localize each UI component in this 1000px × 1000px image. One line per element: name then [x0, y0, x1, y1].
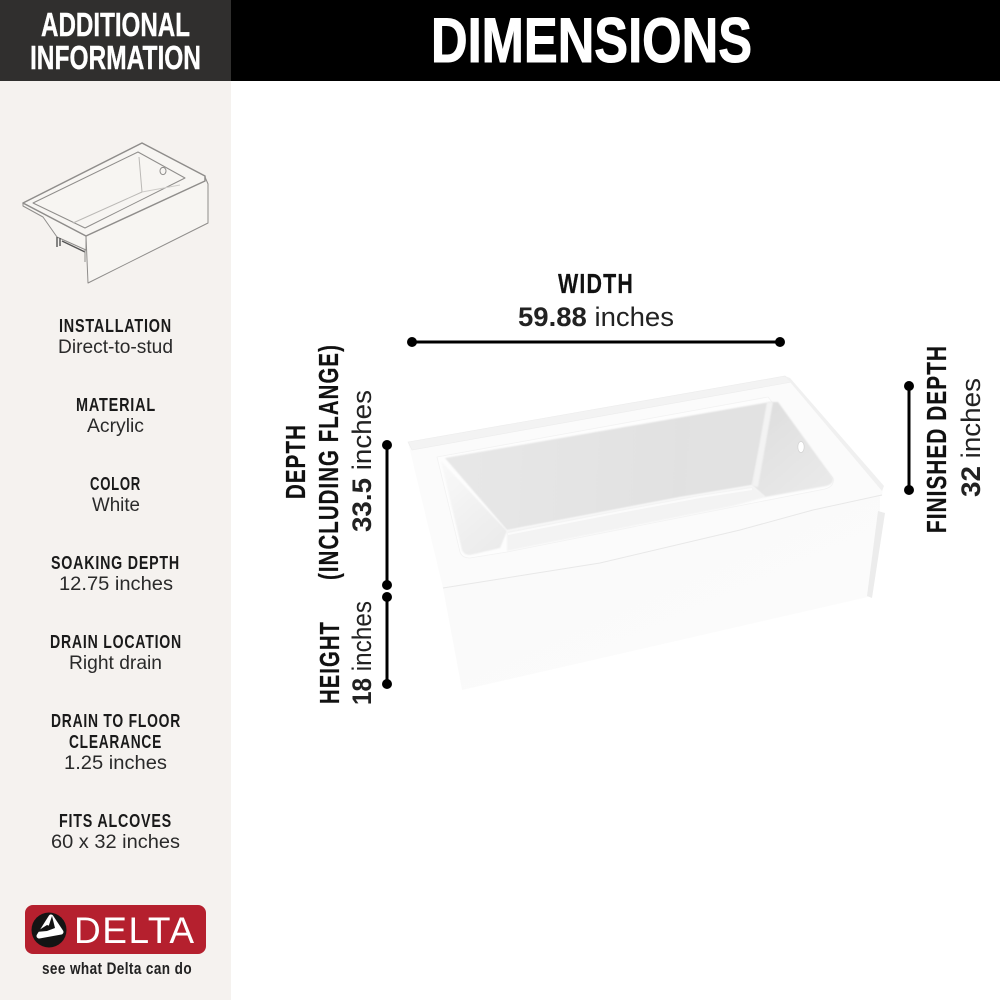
- header: dimensions title: [231, 0, 1000, 81]
- dimension: height: [314, 592, 392, 705]
- spec: drain to floor clearance: 1.25 inches: [64, 753, 167, 774]
- spec: drain to floor clearance: [51, 711, 181, 774]
- side flange edge: [785, 376, 884, 491]
- delta logo: DELTA: [74, 910, 194, 951]
- corner strip: [752, 402, 773, 487]
- right flange: [867, 511, 885, 598]
- delta logo: [25, 905, 206, 978]
- floor highlight line: [508, 489, 752, 534]
- spec: fits alcoves: 60 x 32 inches: [51, 832, 180, 853]
- basin right wall: [752, 402, 833, 497]
- icon: overflow drain: [798, 442, 804, 452]
- spec: installation: Direct-to-stud: [58, 337, 173, 358]
- dimension: width: WIDTH: [558, 268, 634, 299]
- tub deck: [408, 376, 883, 588]
- header: additional information: INFORMATION: [30, 39, 201, 76]
- tub floor: [507, 486, 766, 551]
- dimension: height: 18 inches: [347, 601, 377, 705]
- delta logo: see what Delta can do: [42, 960, 192, 978]
- dimension: width: [407, 268, 785, 347]
- bathtub illustration: [408, 376, 885, 690]
- dimension: height: HEIGHT: [314, 621, 345, 704]
- dimension: finished depth: 32 inches: [956, 378, 986, 497]
- header: additional information: [0, 0, 231, 81]
- rear flange: [408, 376, 792, 450]
- header: additional information: ADDITIONAL: [41, 6, 190, 43]
- spec: material: [76, 395, 156, 437]
- spec: color: White: [92, 495, 140, 516]
- basin left wall: [441, 461, 507, 555]
- spec: color: [90, 474, 141, 516]
- basin rim: [437, 397, 833, 558]
- spec: drain to floor clearance: CLEARANCE: [69, 732, 162, 752]
- spec: fits alcoves: FITS ALCOVES: [59, 811, 172, 831]
- basin back wall: [445, 402, 770, 530]
- dimension: depth including flange: [280, 344, 392, 590]
- spec: installation: [58, 316, 173, 358]
- dimension: depth including flange: 33.5 inches: [347, 390, 377, 532]
- spec: drain location: Right drain: [69, 653, 162, 674]
- spec: drain location: [50, 632, 182, 674]
- dimension: width: 59.88 inches: [518, 302, 674, 332]
- spec: soaking depth: 12.75 inches: [59, 574, 173, 595]
- dimension: depth including flange: (INCLUDING FLANGE): [313, 344, 344, 580]
- spec: soaking depth: SOAKING DEPTH: [51, 553, 180, 573]
- dimension: finished depth: [904, 345, 986, 533]
- spec: soaking depth: [51, 553, 180, 595]
- tub front apron: [443, 495, 880, 690]
- icon: tub line drawing: [23, 143, 208, 283]
- spec: color: COLOR: [90, 474, 141, 494]
- spec: drain location: DRAIN LOCATION: [50, 632, 182, 652]
- specs list: [50, 316, 182, 853]
- spec: fits alcoves: [51, 811, 180, 853]
- icon: delta emblem: [32, 912, 66, 948]
- front rim highlight: [443, 495, 882, 588]
- spec: drain to floor clearance: DRAIN TO FLOOR: [51, 711, 181, 731]
- spec: material: Acrylic: [87, 416, 144, 437]
- dimension: depth including flange: DEPTH: [280, 424, 311, 499]
- dimension: finished depth: FINISHED DEPTH: [921, 345, 952, 533]
- header: dimensions title: DIMENSIONS: [431, 6, 752, 76]
- spec: installation: INSTALLATION: [59, 316, 172, 336]
- sidebar background: [0, 81, 231, 1000]
- spec: material: MATERIAL: [76, 395, 156, 415]
